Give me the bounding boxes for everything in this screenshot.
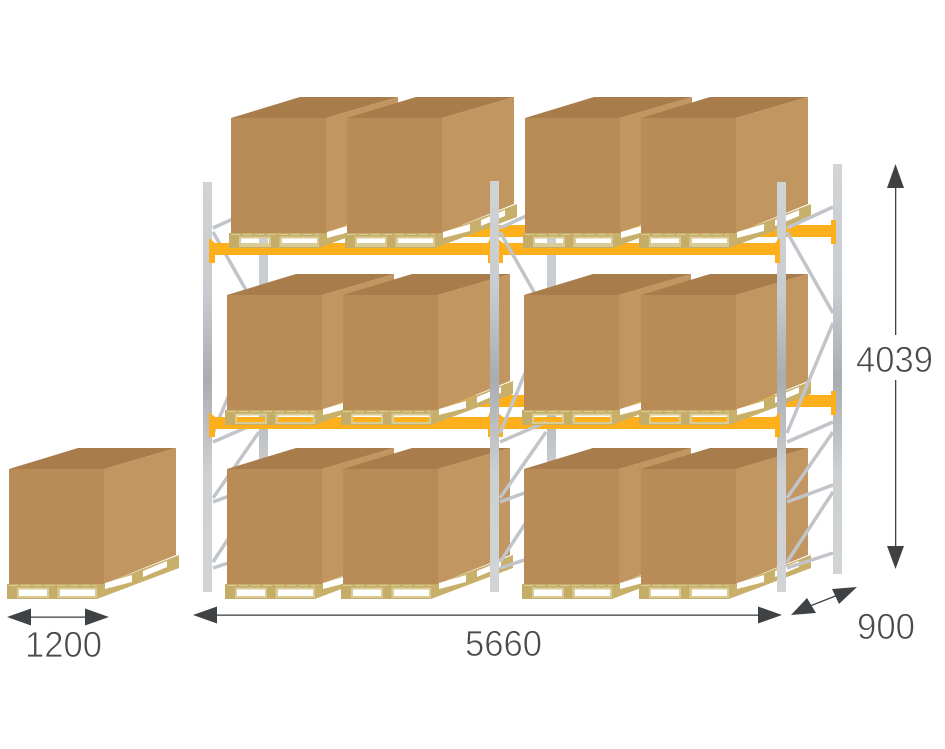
left beam end plate, lower [209,412,215,437]
right beam end plate, lower [775,412,780,437]
upper front beam, left bay [212,238,493,263]
right rear beam plate, lower [831,391,836,415]
lower front beam, left bay [212,412,493,437]
left frame bracing [213,207,259,568]
standalone pallet load [7,448,179,599]
left beam end plate, upper [209,238,215,263]
right rear upright [833,164,842,574]
lower front beam, right bay [497,412,778,437]
label: 5660: 5660 [465,623,542,664]
label: 900: 900 [857,606,915,647]
label: 1200: 1200 [25,624,102,665]
pallet load: middle row, left bay, second [341,274,513,425]
pallet load: bottom row, left bay, second [341,448,513,599]
pallet load: top row, right bay, second [639,97,811,248]
right frame bracing [787,207,833,568]
right beam end plate, upper [775,238,780,263]
pallet load: top row, left bay, second [345,97,517,248]
middle frame bracing [500,207,546,568]
dimension arrow: 5660 width [193,606,782,624]
middle front upright [490,181,499,592]
dimension arrow: 900 depth [791,587,857,615]
upper rear beam [268,225,834,237]
light strip showing through top row pallet openings [241,243,727,246]
right rear beam plate, upper [831,220,836,244]
left rear upright [259,164,268,574]
middle rear upright [547,164,556,574]
left front upright [203,182,212,592]
pallet load: top row, left bay, first [229,97,401,248]
pallet load: bottom row, right bay, second [639,448,811,599]
pallet load: top row, right bay, first [523,97,695,248]
pallet load: bottom row, left bay, first [225,448,397,599]
lower rear beam [268,395,834,407]
pallet load: middle row, right bay, second [639,274,811,425]
dimension arrow: 4039 height [887,164,904,569]
pallet load: middle row, right bay, first [522,274,694,425]
pallet load: middle row, left bay, first [225,274,397,425]
label: 4039: 4039 [856,339,933,380]
pallet load: bottom row, right bay, first [522,448,694,599]
dimension arrow: 1200 width [7,608,109,626]
upper front beam, right bay [497,238,778,263]
right front upright [777,182,786,592]
